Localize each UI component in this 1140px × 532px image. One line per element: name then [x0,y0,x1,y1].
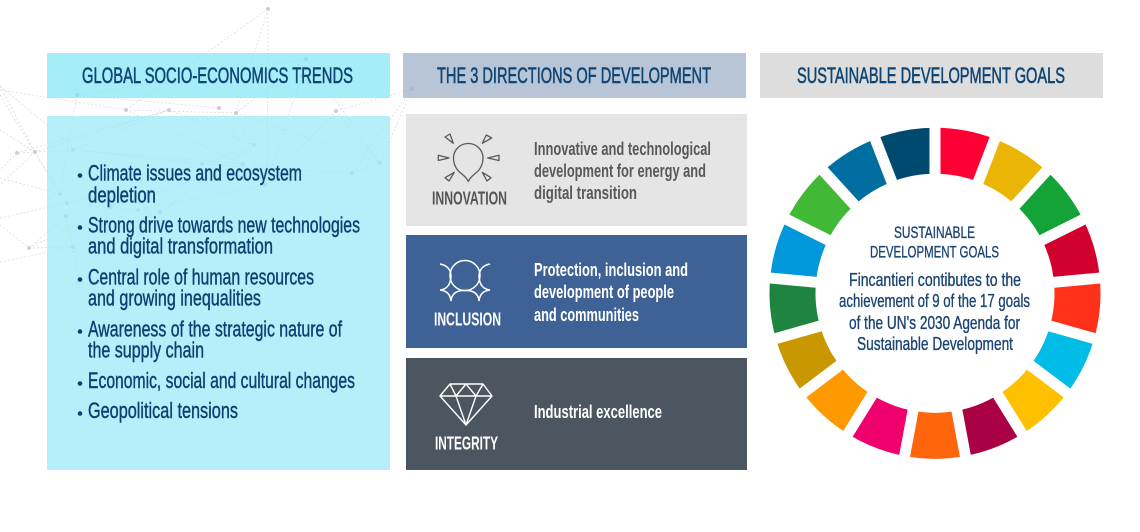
description: inclusion: development of people [534,282,674,302]
description: inclusion: and communities [534,305,639,325]
bullet: supply chain [78,316,343,362]
bullet: new technologies: Strong drive towards new technologies [88,212,360,238]
label: integrity: INTEGRITY [435,434,498,454]
panel: innovation [406,114,747,226]
wheel centre text: of the UN's 2030 Agenda for [849,313,1020,333]
bullet: new technologies [78,212,360,258]
bullet: geopolitical tensions: Geopolitical tensions [88,398,238,423]
description: inclusion: Protection, inclusion and [534,260,688,280]
wheel centre text: Fincantieri contibutes to the [849,270,1021,290]
bullet: human resources: Central role of human resources [88,264,314,290]
bullet: climate issues: depletion [88,182,156,208]
bullet: climate issues: Climate issues and ecosystem [88,160,302,186]
icon: light bulb [438,134,499,182]
description: innovation: Innovative and technological [534,139,711,159]
heading: sustainable development goals [760,53,1103,98]
icon: circle and stars [440,260,490,301]
wheel centre text: Sustainable Development [857,334,1013,354]
bullet: human resources [78,264,314,310]
bullet: economic changes: Economic, social and cultural changes [88,368,355,393]
panel: integrity [406,358,747,470]
wheel centre text: SUSTAINABLE [894,223,975,242]
wheel centre text: achievement of 9 of the 17 goals [839,291,1030,311]
wheel centre disc [816,174,1054,412]
panel: inclusion [406,235,747,348]
icon: diamond [440,384,492,425]
description: innovation: digital transition [534,183,637,203]
heading: global socio-economics trends [47,53,390,98]
background network pattern [0,7,414,290]
wheel centre text: DEVELOPMENT GOALS [870,242,999,262]
description: innovation [534,139,711,203]
heading: the 3 directions of development: THE 3 DIRECTIONS OF DEVELOPMENT [437,63,711,88]
bullet: supply chain: Awareness of the strategic nature of [88,316,343,342]
description: inclusion [534,260,688,325]
label: innovation: INNOVATION [432,188,507,208]
label: inclusion: INCLUSION [434,310,501,330]
description: integrity: Industrial excellence [534,402,662,422]
heading: global socio-economics trends: GLOBAL SOCIO-ECONOMICS TRENDS [82,63,353,88]
description: innovation: development for energy and [534,161,706,181]
bullet: new technologies: and digital transformation [88,234,273,258]
heading: the 3 directions of development [403,53,746,98]
bullet: human resources: and growing inequalities [88,286,261,310]
chart: SDG wheel [734,92,1136,495]
panel: global trends list [47,116,390,470]
wheel centre text [839,223,1030,354]
bullet: climate issues [78,160,302,208]
bullet: supply chain: the supply chain [88,338,204,362]
bullet: economic changes [78,368,355,393]
